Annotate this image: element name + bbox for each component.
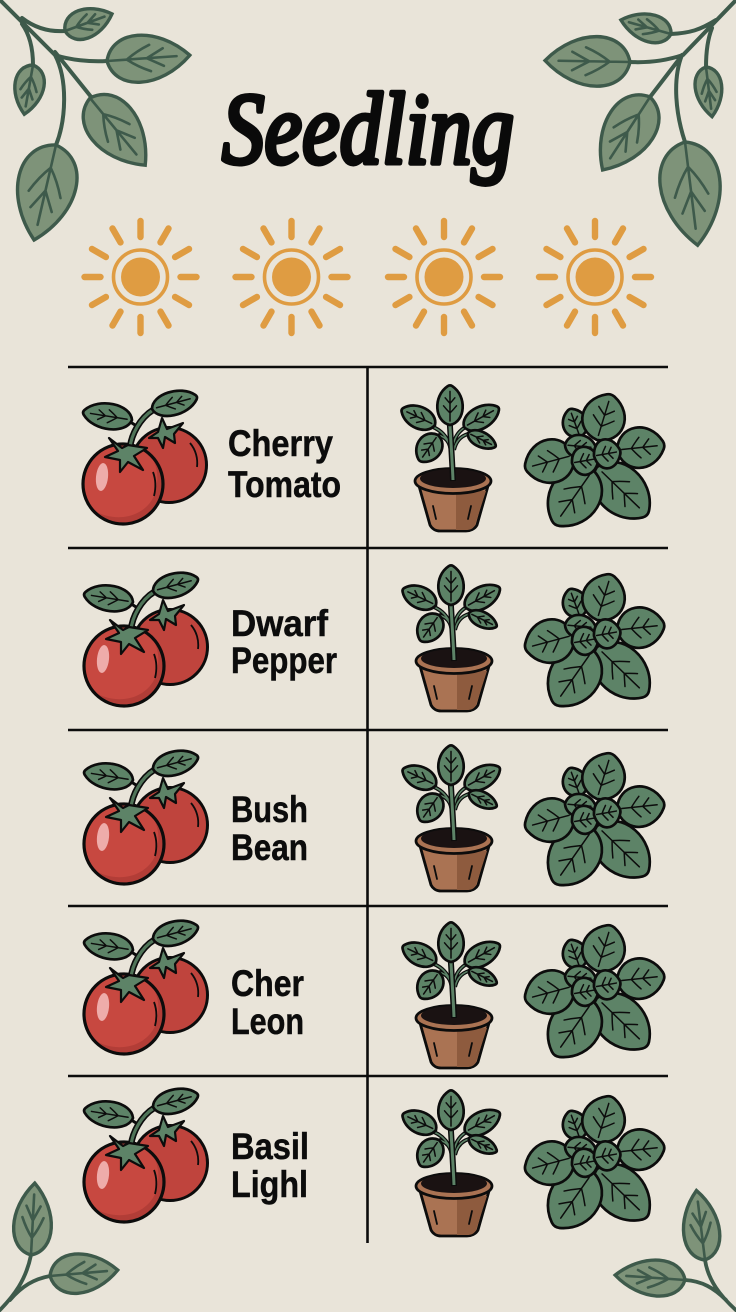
icon: potted seedling <box>398 745 505 891</box>
decoration: bottom-left leaf branch <box>0 1182 119 1312</box>
label: Pepper <box>231 640 337 681</box>
icon: potted seedling <box>398 565 505 711</box>
icon: basil leaves <box>520 568 666 719</box>
label: Bush <box>231 789 308 830</box>
icon: tomatoes <box>82 568 208 717</box>
decoration: top-left leaf branch <box>0 0 191 247</box>
row 4: Cher Leon <box>82 916 666 1070</box>
icon: potted seedling <box>398 1090 505 1236</box>
icon: potted seedling <box>398 922 505 1068</box>
label: Cherry <box>228 423 333 464</box>
title: Seedling <box>222 73 514 186</box>
decoration: top-right leaf branch <box>545 0 736 249</box>
row 5: Basil Lighl <box>82 1084 666 1241</box>
icon: tomatoes <box>82 1084 208 1233</box>
row 2: Dwarf Pepper <box>82 565 666 719</box>
label: Basil <box>231 1126 309 1167</box>
icon: tomatoes <box>81 386 206 535</box>
label: Bean <box>231 827 308 868</box>
icon: basil leaves <box>520 919 666 1070</box>
icon: sun 1 <box>84 221 196 333</box>
label: Leon <box>231 1001 304 1042</box>
icon: tomatoes <box>82 746 208 895</box>
icon: basil leaves <box>520 1090 666 1241</box>
label: Cher <box>231 963 304 1004</box>
icon: basil leaves <box>520 747 666 898</box>
icon: tomatoes <box>82 916 208 1065</box>
sun rating row <box>84 221 651 333</box>
icon: potted seedling <box>397 385 504 531</box>
row 3: Bush Bean <box>82 745 666 898</box>
label: Lighl <box>231 1164 308 1205</box>
icon: sun 4 <box>539 221 651 333</box>
decoration: bottom-right leaf branch <box>614 1188 736 1312</box>
row 1: Cherry Tomato <box>81 385 666 539</box>
icon: basil leaves <box>520 388 666 539</box>
label: Tomato <box>228 464 341 505</box>
icon: sun 3 <box>388 221 500 333</box>
icon: sun 2 <box>236 221 348 333</box>
label: Dwarf <box>231 603 329 644</box>
